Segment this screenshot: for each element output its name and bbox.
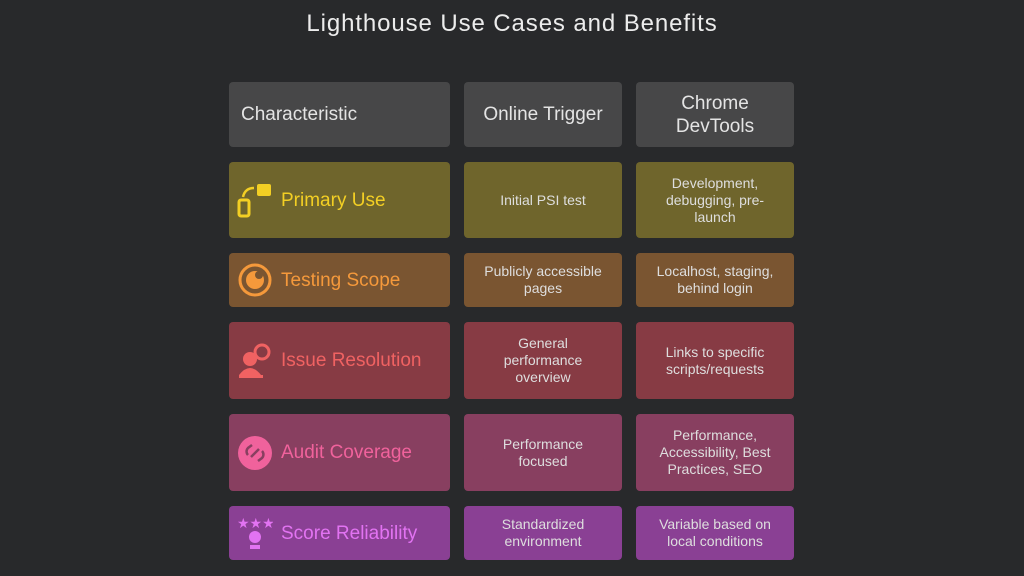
icon: devices: [238, 184, 271, 218]
cell: scripts/requests: [666, 360, 764, 376]
cell: [636, 162, 794, 238]
row label: testing scope: Testing Scope: [281, 270, 400, 290]
cell: debugging, pre-: [666, 192, 764, 208]
cell: overview: [515, 369, 571, 385]
cell: Localhost, staging,: [657, 263, 773, 279]
cell: Links to specific: [666, 344, 764, 360]
cell: Initial PSI test: [500, 192, 586, 208]
cell: [464, 322, 622, 399]
cell: [636, 414, 794, 491]
cell: [464, 253, 622, 307]
header: chrome devtools: Chrome: [681, 92, 749, 114]
cell: Performance: [503, 436, 583, 452]
cell: [464, 506, 622, 560]
icon: person: [239, 344, 270, 378]
icon: link: [238, 436, 272, 470]
cell: Performance,: [673, 427, 757, 443]
cell: Practices, SEO: [668, 461, 762, 477]
cell: launch: [694, 208, 736, 224]
cell: [636, 322, 794, 399]
cell: Publicly accessible: [484, 263, 602, 279]
row label: audit coverage: Audit Coverage: [281, 442, 412, 463]
title: Lighthouse Use Cases and Benefits: [306, 10, 718, 37]
cell: [636, 506, 794, 560]
row label: score reliability: [229, 506, 450, 560]
cell: Variable based on: [659, 516, 771, 532]
cell: Standardized: [502, 516, 584, 532]
header: online trigger: [464, 82, 622, 147]
cell: [464, 414, 622, 491]
icon: scope: [238, 264, 272, 296]
cell: environment: [504, 533, 582, 549]
cell: behind login: [677, 280, 753, 296]
cell: [464, 162, 622, 238]
header: characteristic: [229, 82, 450, 147]
row label: score reliability: Score Reliability: [281, 522, 417, 544]
header: chrome devtools: DevTools: [676, 116, 754, 136]
row label: issue resolution: [229, 322, 450, 399]
icon: stars: [237, 515, 273, 549]
cell: Development,: [672, 174, 758, 190]
row label: primary use: Primary Use: [281, 190, 386, 210]
header: chrome devtools: [636, 82, 794, 147]
header: characteristic: Characteristic: [241, 104, 357, 125]
row label: primary use: [229, 162, 450, 238]
cell: Accessibility, Best: [660, 444, 770, 460]
row label: testing scope: [229, 253, 450, 307]
row label: issue resolution: Issue Resolution: [281, 350, 421, 371]
cell: local conditions: [667, 533, 763, 549]
row label: audit coverage: [229, 414, 450, 491]
cell: [636, 253, 794, 307]
cell: pages: [524, 280, 562, 296]
cell: performance: [504, 352, 582, 368]
header: online trigger: Online Trigger: [483, 104, 603, 125]
cell: General: [518, 335, 568, 351]
cell: focused: [518, 452, 568, 468]
